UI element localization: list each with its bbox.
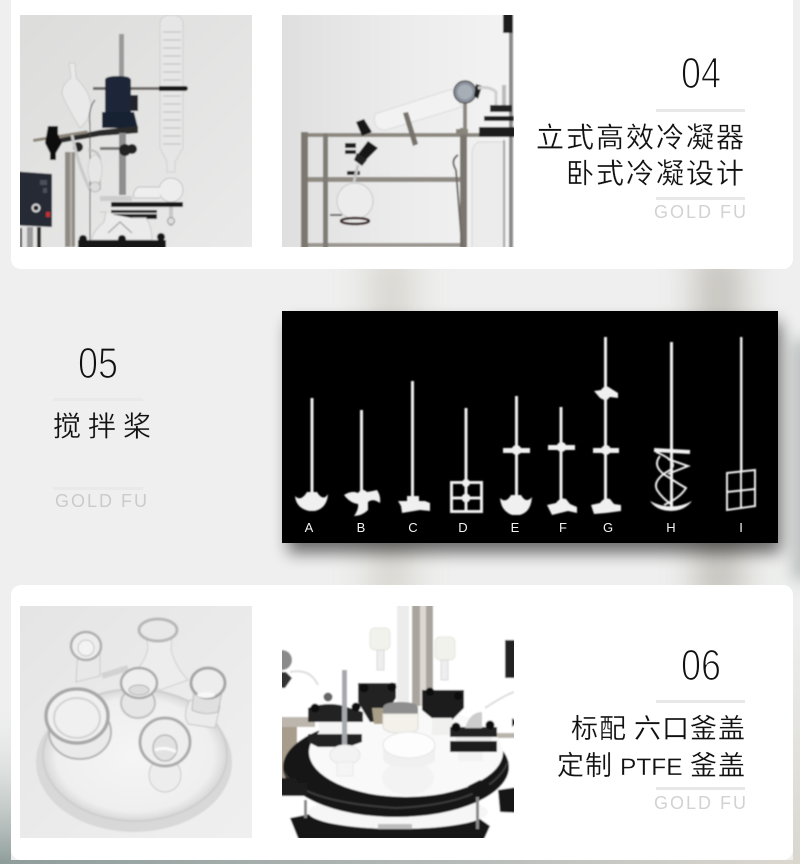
text: feature 06 line 1: 标配 — [571, 714, 627, 744]
stirrer labels: D — [458, 520, 468, 535]
text: feature 06 line 2: 釜盖 — [690, 751, 746, 781]
divider 06 top — [656, 700, 745, 703]
text: stirring paddle: 搅拌桨 — [53, 411, 158, 442]
text: feature 04 line 2: 卧式冷凝设计 — [566, 158, 746, 189]
stirrer G — [591, 337, 621, 514]
stirrer labels: I — [739, 520, 743, 535]
brand: gold fu 04: GOLD FU — [654, 202, 748, 222]
text: feature 06 line 2: PTFE — [620, 754, 683, 781]
divider 04 top — [656, 109, 745, 112]
photo: horizontal condenser frame — [282, 15, 514, 247]
brand: gold fu 06: GOLD FU — [654, 793, 748, 813]
stirrer labels: H — [666, 520, 676, 535]
stirrer labels: G — [603, 520, 613, 535]
heading: 04: 04 — [681, 49, 721, 98]
brand: gold fu 05: GOLD FU — [55, 491, 149, 511]
text: feature 06 line 2: 定制 — [557, 751, 613, 781]
heading: 06: 06 — [681, 641, 721, 690]
panel: card 06 — [10, 585, 793, 860]
stirrer labels: B — [357, 520, 365, 535]
panel: stirrer types — [282, 311, 778, 543]
stirrer labels: A — [305, 520, 314, 535]
stirrer A — [295, 398, 328, 511]
stirrer labels — [305, 520, 743, 535]
stirrer labels: C — [408, 520, 418, 535]
divider 06 bottom — [656, 787, 745, 790]
stirrer labels: F — [559, 520, 567, 535]
photo: glass reactor lid — [20, 606, 252, 838]
stirrer C — [398, 381, 430, 513]
photo: vertical condenser reactor — [20, 15, 252, 247]
divider 04 bottom — [656, 197, 745, 200]
text: feature 06 line 1: 六口釜盖 — [634, 714, 746, 744]
stirrer H — [650, 342, 692, 511]
divider 05 top — [53, 398, 143, 401]
photo: PTFE lid assembly — [282, 606, 514, 838]
panel: card 04 — [10, 0, 793, 269]
heading: 05: 05 — [78, 339, 118, 388]
shadow of stirrer panel — [288, 322, 781, 553]
stirrer labels: E — [511, 520, 520, 535]
stirrer F — [547, 407, 577, 515]
text: feature 04 line 1: 立式高效冷凝器 — [536, 122, 746, 153]
stirrer D — [451, 408, 482, 512]
stirrer I — [727, 337, 755, 510]
stirrer E — [500, 396, 532, 515]
divider 05 bottom — [53, 487, 143, 490]
stirrer B — [344, 410, 380, 516]
